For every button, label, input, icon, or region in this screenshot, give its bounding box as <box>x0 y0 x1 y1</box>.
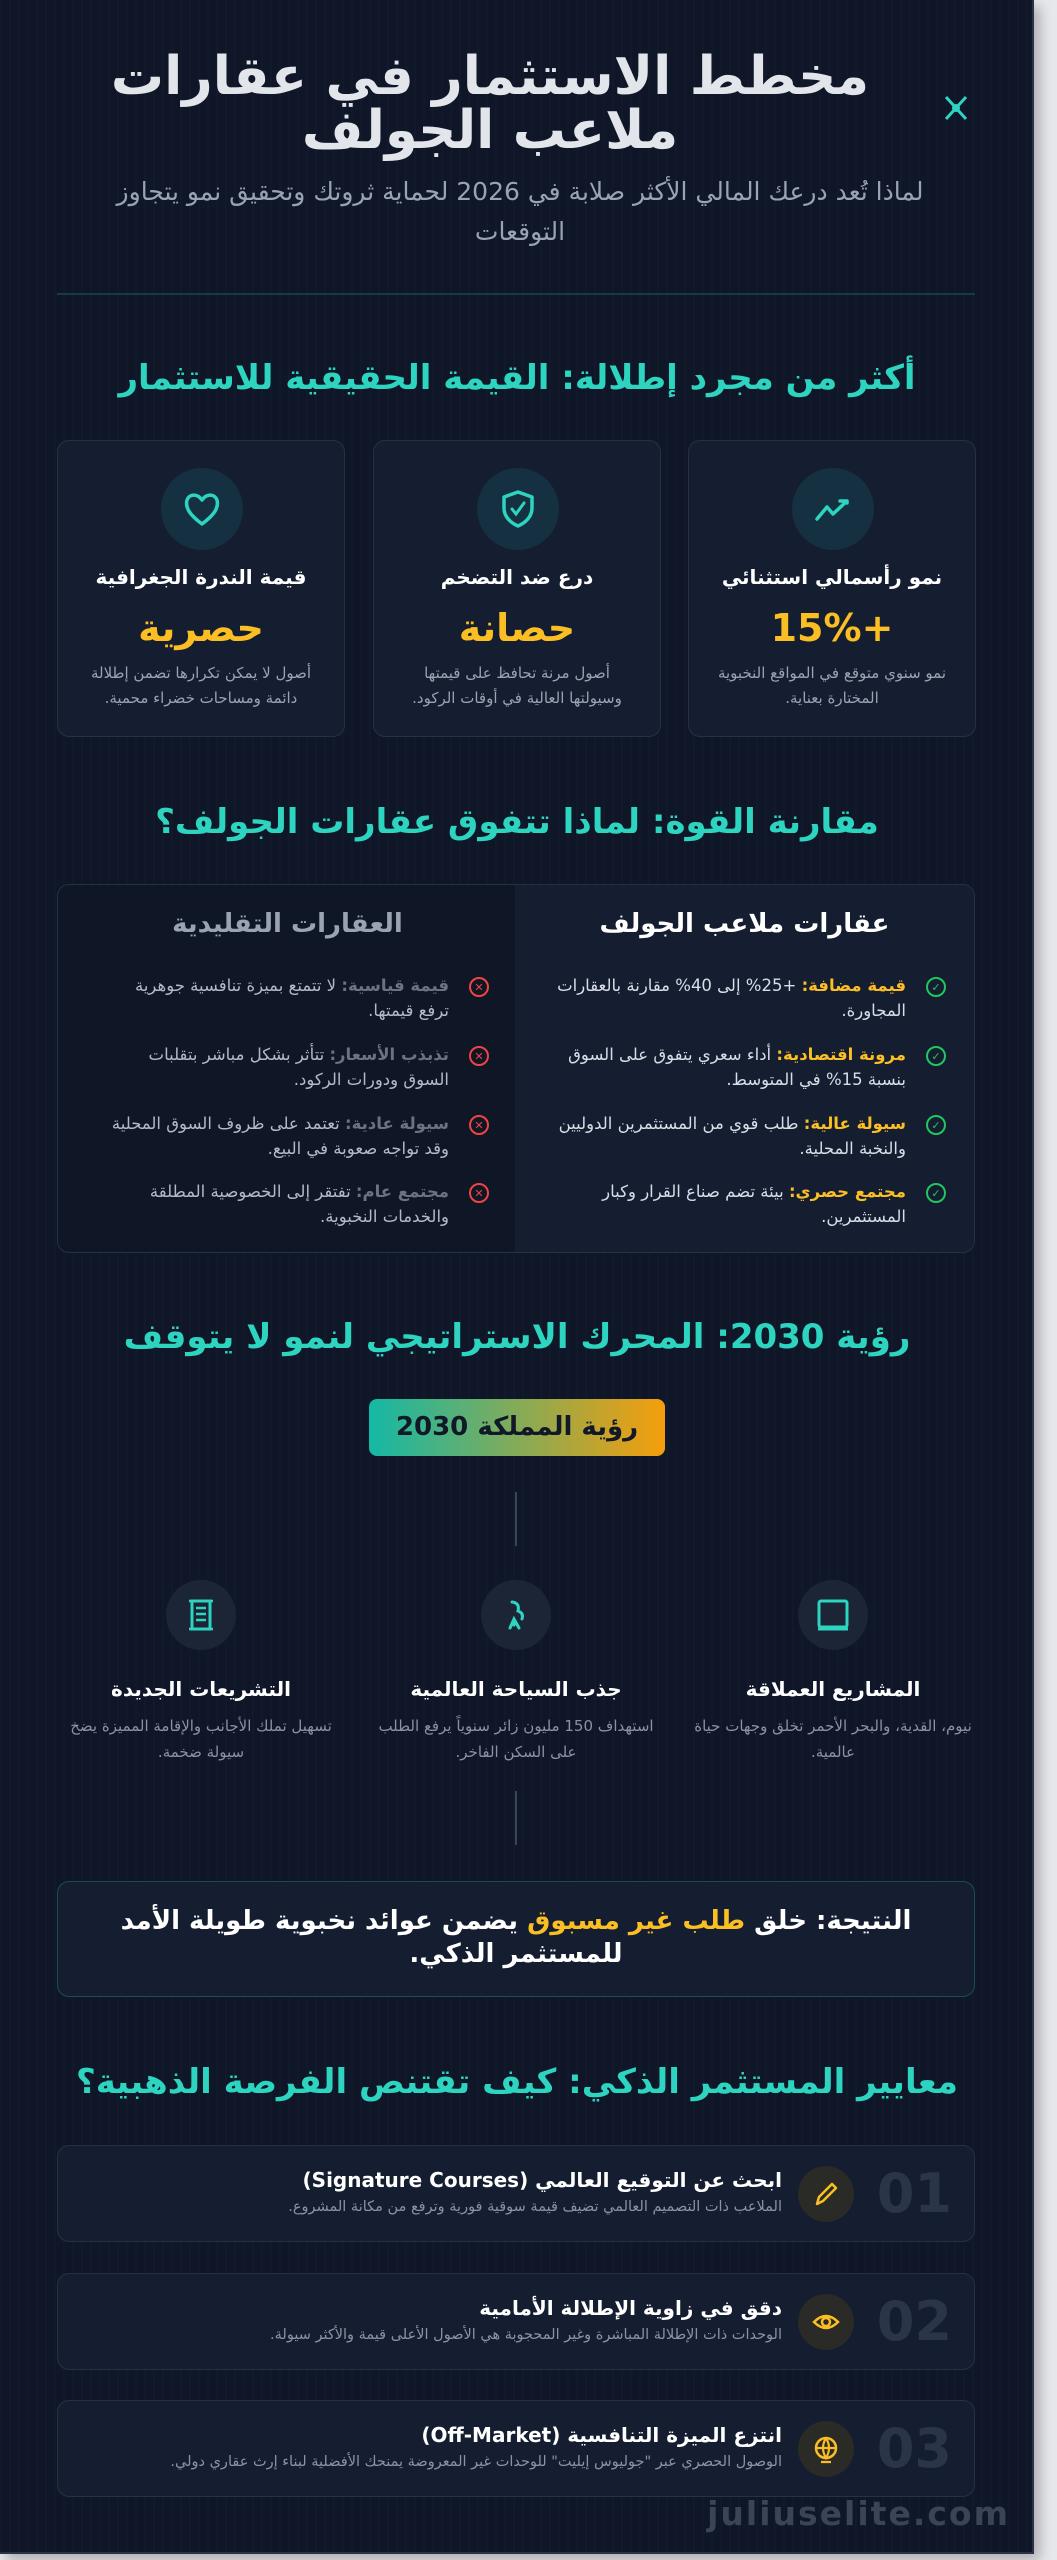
card: inflation shield <box>373 440 661 737</box>
watermark: juliuselite.com <box>707 2494 1010 2533</box>
heading: section 2: مقارنة القوة: لماذا تتفوق عقارات الجولف؟ <box>155 802 879 842</box>
card: scarcity: حصرية <box>138 606 264 650</box>
card: capital growth: +15% <box>771 606 893 650</box>
list: traditional cons: سيولة عادية: تعتمد على ظروف السوق المحلية وقد تواجه صعوبة في البيع. <box>112 1114 449 1158</box>
step 01: الملاعب ذات التصميم العالمي تضيف قيمة سوقية فورية وترفع من مكانة المشروع. <box>288 2199 782 2215</box>
heading: traditional column: العقارات التقليدية <box>172 909 403 939</box>
step 03: 03 <box>877 2417 952 2480</box>
list: golf pros: ✓ <box>931 1118 941 1132</box>
card: scarcity <box>57 440 345 737</box>
icon: shield <box>477 468 559 550</box>
callout: result <box>57 1881 975 1997</box>
pillar: tourism <box>378 1580 654 1761</box>
list: golf pros: قيمة مضافة: +25% إلى 40% مقارنة بالعقارات المجاورة. <box>557 976 906 1020</box>
step 02: 02 <box>877 2290 952 2353</box>
list: golf pros: ✓ <box>931 980 941 994</box>
list: traditional cons: قيمة قياسية: لا تتمتع بميزة تنافسية جوهرية ترفع قيمتها. <box>135 976 449 1020</box>
list: golf pros: ✓ <box>931 1050 941 1062</box>
pillar: mega projects: المشاريع العملاقة <box>746 1677 920 1701</box>
step 02: دقق في زاوية الإطلالة الأمامية <box>479 2296 782 2320</box>
card: scarcity: قيمة الندرة الجغرافية <box>96 565 306 589</box>
list: traditional cons <box>112 976 489 1226</box>
pillar: legislation: تسهيل تملك الأجانب والإقامة المميزة يضخ سيولة ضخمة. <box>70 1717 332 1761</box>
list: golf pros: مرونة اقتصادية: أداء سعري يتفوق على السوق بنسبة 15% في المتوسط. <box>568 1045 906 1089</box>
icon: golf cross <box>945 96 967 120</box>
icon: tourism <box>481 1580 551 1650</box>
heading: section 4: معايير المستثمر الذكي: كيف تقتنص الفرصة الذهبية؟ <box>76 2062 958 2102</box>
list: golf pros: ✓ <box>931 1186 941 1200</box>
icon: eye <box>798 2294 854 2350</box>
card: inflation shield: درع ضد التضخم <box>441 565 593 589</box>
icon: tablet <box>798 1580 868 1650</box>
pillar: tourism: جذب السياحة العالمية <box>410 1677 622 1701</box>
card: inflation shield: أصول مرنة تحافظ على قيمتها وسيولتها العالية في أوقات الركود. <box>412 664 622 707</box>
heading: section 3: رؤية 2030: المحرك الاستراتيجي لنمو لا يتوقف <box>124 1317 910 1357</box>
step 01: ابحث عن التوقيع العالمي (Signature Courses) <box>303 2168 782 2192</box>
title: مخطط الاستثمار في عقارات ملاعب الجولف <box>111 46 869 161</box>
list: golf pros: سيولة عالية: طلب قوي من المستثمرين الدوليين والنخبة المحلية. <box>559 1114 906 1158</box>
step 01: 01 <box>877 2162 952 2225</box>
badge: vision 2030 <box>369 1399 665 1456</box>
list: traditional cons: ✕ <box>474 1118 484 1132</box>
heading: golf column: عقارات ملاعب الجولف <box>600 909 889 939</box>
list: traditional cons: تذبذب الأسعار: تتأثر بشكل مباشر بتقلبات السوق ودورات الركود. <box>149 1045 449 1089</box>
list: traditional cons: ✕ <box>474 980 484 994</box>
icon: trend <box>792 468 874 550</box>
subtitle: لماذا تُعد درعك المالي الأكثر صلابة في 2026 لحماية ثروتك وتحقيق نمو يتجاوز التوقعات <box>117 177 923 246</box>
pillar: mega projects: نيوم، القدية، والبحر الأحمر تخلق وجهات حياة عالمية. <box>694 1717 972 1761</box>
icon: globe <box>798 2421 854 2477</box>
list: golf pros <box>557 976 946 1226</box>
list: traditional cons: ✕ <box>474 1050 484 1062</box>
step 02 <box>57 2273 975 2370</box>
pillar: tourism: استهداف 150 مليون زائر سنوياً يرفع الطلب على السكن الفاخر. <box>378 1717 654 1761</box>
list: traditional cons: مجتمع عام: تفتقر إلى الخصوصية المطلقة والخدمات النخبوية. <box>150 1182 449 1226</box>
step 03 <box>57 2400 975 2497</box>
icon: heart <box>161 468 243 550</box>
callout: result: النتيجة: خلق طلب غير مسبوق يضمن عوائد نخبوية طويلة الأمد <box>121 1906 911 1936</box>
step 03: انتزع الميزة التنافسية (Off-Market) <box>421 2423 782 2447</box>
card: scarcity: أصول لا يمكن تكرارها تضمن إطلالة دائمة ومساحات خضراء محمية. <box>91 664 311 707</box>
step 01 <box>57 2145 975 2242</box>
heading: section 1: أكثر من مجرد إطلالة: القيمة الحقيقية للاستثمار <box>118 358 916 398</box>
panel: comparison <box>57 884 975 1253</box>
pillar: legislation: التشريعات الجديدة <box>111 1677 291 1701</box>
card: capital growth: نمو سنوي متوقع في المواقع النخبوية المختارة بعناية. <box>718 664 946 707</box>
icon: pencil <box>798 2166 854 2222</box>
card: capital growth: نمو رأسمالي استثنائي <box>722 565 942 589</box>
badge: vision 2030: رؤية المملكة 2030 <box>396 1412 638 1442</box>
step 02: الوحدات ذات الإطلالة المباشرة وغير المحجوبة هي الأصول الأعلى قيمة والأكثر سيولة. <box>270 2327 782 2343</box>
card: inflation shield: حصانة <box>459 606 575 650</box>
pillar: mega projects <box>694 1580 972 1761</box>
pillar: legislation <box>70 1580 332 1761</box>
icon: document <box>166 1580 236 1650</box>
callout: result: للمستثمر الذكي. <box>409 1939 623 1969</box>
card: capital growth <box>688 440 976 737</box>
list: golf pros: مجتمع حصري: بيئة تضم صناع القرار وكبار المستثمرين. <box>602 1182 906 1226</box>
list: traditional cons: ✕ <box>474 1186 484 1200</box>
step 03: الوصول الحصري عبر "جوليوس إيليت" للوحدات غير المعروضة يمنحك الأفضلية لبناء إرث عقاري دولي. <box>170 2454 782 2470</box>
